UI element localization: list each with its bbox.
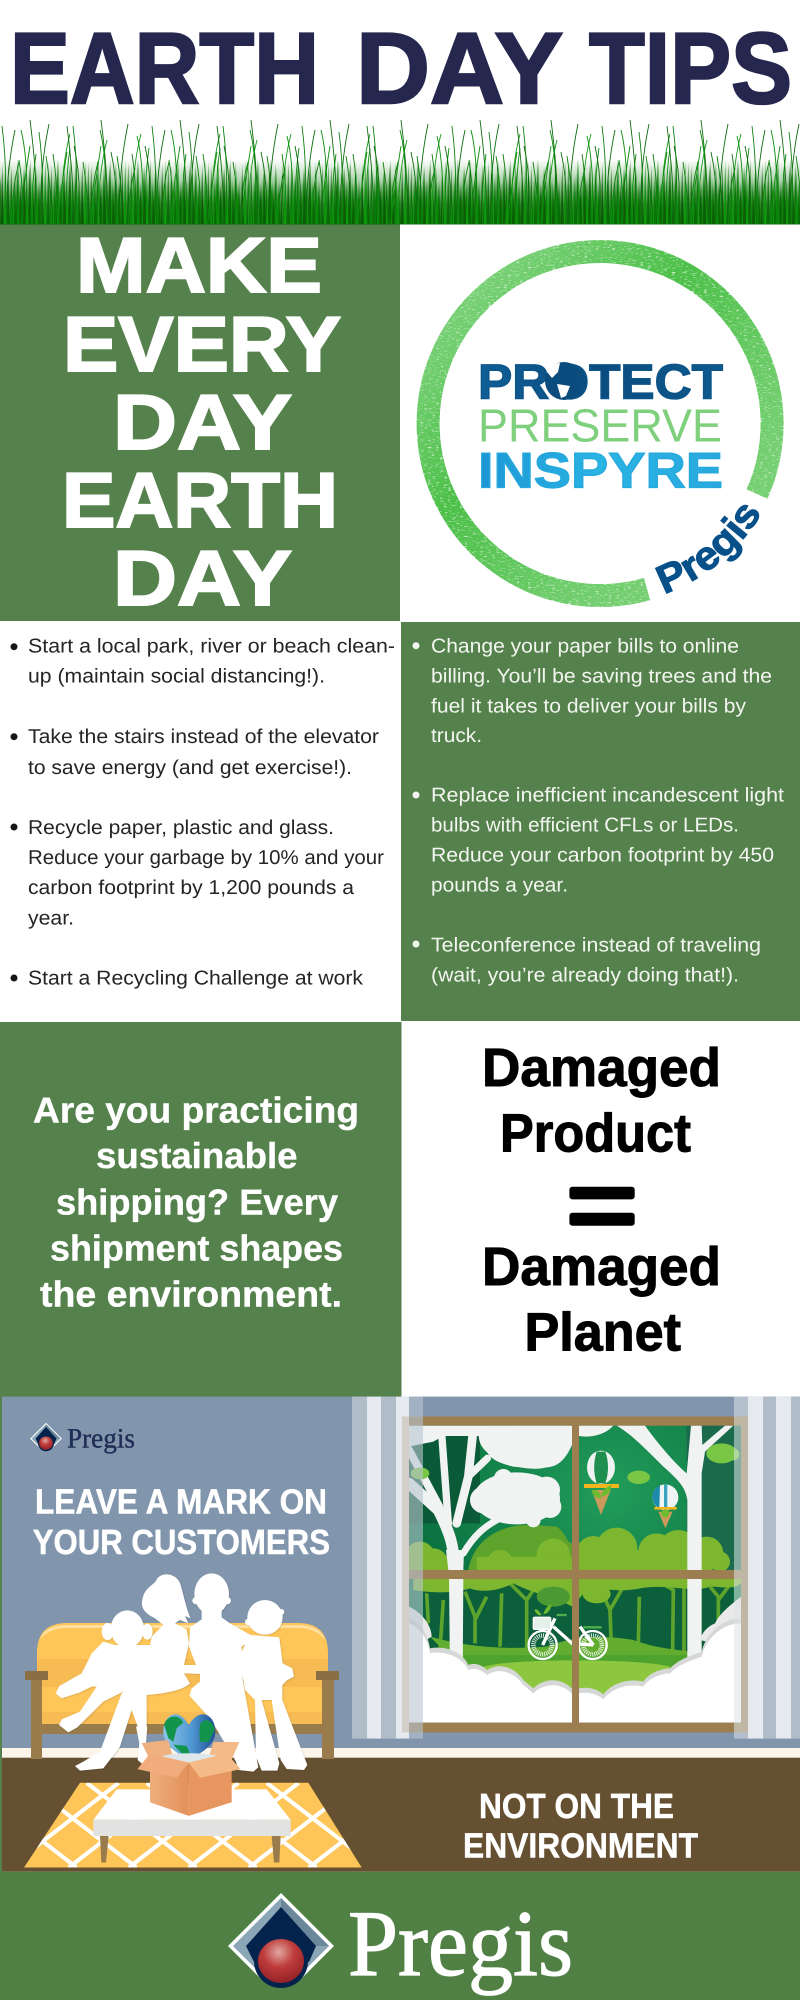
pregis wordmark: Pregis: [348, 1892, 573, 1996]
bicycle: [529, 1604, 607, 1659]
small pregis logo: [30, 1423, 135, 1455]
icon: heart globe: [163, 1714, 215, 1759]
damaged planet text: Planet: [524, 1303, 681, 1363]
window mullions: [402, 1416, 748, 1732]
question text: shipment shapes: [50, 1228, 343, 1269]
tip: teleconference: Teleconference instead of traveling: [431, 935, 761, 957]
girl: [56, 1610, 153, 1732]
damaged product text: [482, 1038, 721, 1164]
panel: make every day earth day: [0, 221, 400, 622]
tip: recycle: year.: [28, 908, 74, 930]
tip: stairs: to save energy (and get exercise!).: [28, 757, 352, 779]
tip: teleconference: [412, 935, 761, 987]
balloon large: [584, 1451, 619, 1515]
father: [184, 1573, 258, 1772]
window frame: [402, 1416, 748, 1732]
panel: protect preserve inspyre badge: [416, 240, 784, 607]
title: [10, 13, 792, 125]
tip: stairs: Take the stairs instead of the elevator: [28, 726, 379, 748]
mother: [75, 1574, 191, 1771]
damaged planet text: Damaged: [482, 1237, 721, 1297]
window: [400, 1397, 748, 1739]
small pregis logo: Pregis: [67, 1424, 135, 1455]
protect word: PROTECT: [478, 356, 723, 410]
not on the environment heading: NOT ON THE: [479, 1787, 674, 1826]
panel: tips left: [0, 622, 401, 1022]
balloon small: [652, 1484, 678, 1528]
footer band: [0, 1872, 800, 2000]
pregis ring label: Pregis: [654, 504, 760, 594]
panel: living room illustration: [0, 1397, 800, 1872]
tip: recycle: Recycle paper, plastic and glass.: [28, 817, 334, 839]
icon: logo diamond small: [30, 1423, 62, 1451]
white trunks lower: [449, 1579, 464, 1658]
damaged product text: Damaged: [482, 1038, 721, 1098]
tip: online billing: [412, 636, 772, 747]
tip: recycle: Reduce your garbage by 10% and your: [28, 847, 384, 869]
tip: clean-up: Start a local park, river or beach clean-: [28, 636, 395, 658]
baseboard: [2, 1748, 800, 1758]
grass strip: [0, 112, 800, 224]
tip: clean-up: up (maintain social distancing!).: [28, 666, 325, 688]
question text: shipping? Every: [56, 1181, 338, 1222]
headline lines: [62, 221, 341, 622]
tree canopy dome and bushes: [468, 1525, 572, 1570]
damaged product text: Product: [500, 1104, 691, 1164]
title: EARTH: [10, 13, 319, 125]
damaged planet text: [482, 1237, 721, 1363]
panel: tips right: [401, 622, 800, 1021]
question text: the environment.: [40, 1274, 342, 1315]
boy: [239, 1600, 307, 1771]
wall: [2, 1397, 800, 1749]
icon: globe: [545, 362, 583, 400]
sofa: [25, 1623, 339, 1759]
not on the environment heading: ENVIRONMENT: [463, 1827, 698, 1866]
rug, table and box: [24, 1714, 362, 1868]
inspyre word: INSPYRE: [478, 442, 723, 498]
headline lines: DAY: [113, 378, 292, 466]
headline lines: DAY: [113, 534, 292, 622]
tip: light bulbs: Reduce your carbon footprint by 450: [431, 845, 774, 867]
question text: sustainable: [96, 1135, 298, 1176]
tip: recycling challenge: Start a Recycling Challenge at work: [28, 968, 364, 990]
tip: light bulbs: pounds a year.: [431, 875, 568, 897]
tip: online billing: fuel it takes to deliver your bills by: [431, 696, 746, 718]
tip: light bulbs: [412, 785, 784, 897]
tip: light bulbs: Replace inefficient incandescent light: [431, 785, 784, 807]
green ring: [428, 252, 772, 596]
tip: recycle: carbon footprint by 1,200 pounds a: [28, 877, 355, 899]
green clouds: [411, 1443, 739, 1484]
equals sign: [569, 1187, 635, 1226]
title: DAY: [356, 13, 563, 125]
tip: online billing: truck.: [431, 725, 482, 747]
preserve word: PRESERVE: [478, 400, 722, 452]
leave a mark heading: [33, 1483, 330, 1562]
lower forest: [424, 1584, 734, 1651]
icon: pregis diamond logo: [228, 1893, 334, 1988]
open shipping box: [137, 1740, 241, 1816]
tip: online billing: billing. You’ll be saving trees and the: [431, 666, 772, 688]
left curtain: [352, 1397, 409, 1739]
patterned rug: [24, 1782, 362, 1868]
family silhouette: [56, 1573, 307, 1772]
hills and grass: [430, 1637, 688, 1662]
tip: teleconference: (wait, you’re already doing that!).: [431, 965, 739, 987]
white tree left: [409, 1436, 500, 1557]
tip: recycle: [10, 817, 384, 930]
question text: [33, 1090, 359, 1315]
panel: sustainable shipping question: [0, 1022, 402, 1397]
floor: [2, 1758, 800, 1872]
headline lines: EARTH: [62, 456, 338, 544]
leave a mark heading: YOUR CUSTOMERS: [33, 1523, 330, 1562]
panel: damaged product equals damaged planet: [482, 1038, 721, 1363]
tip: online billing: Change your paper bills to online: [431, 636, 739, 658]
headline lines: MAKE: [76, 221, 322, 309]
tip: light bulbs: bulbs with efficient CFLs or LEDs.: [431, 815, 739, 837]
tip: clean-up: [10, 636, 395, 688]
tip: stairs: [10, 726, 379, 779]
leave a mark heading: LEAVE A MARK ON: [35, 1483, 327, 1522]
question text: Are you practicing: [33, 1090, 359, 1131]
paper clouds: [409, 1596, 741, 1642]
forest scene: [405, 1426, 741, 1723]
headline lines: EVERY: [63, 300, 341, 388]
right curtain: [748, 1397, 800, 1739]
curtains over window: [400, 1397, 748, 1739]
white tree right: [617, 1426, 733, 1570]
not on the environment heading: [463, 1787, 698, 1866]
coffee table: [93, 1789, 291, 1863]
